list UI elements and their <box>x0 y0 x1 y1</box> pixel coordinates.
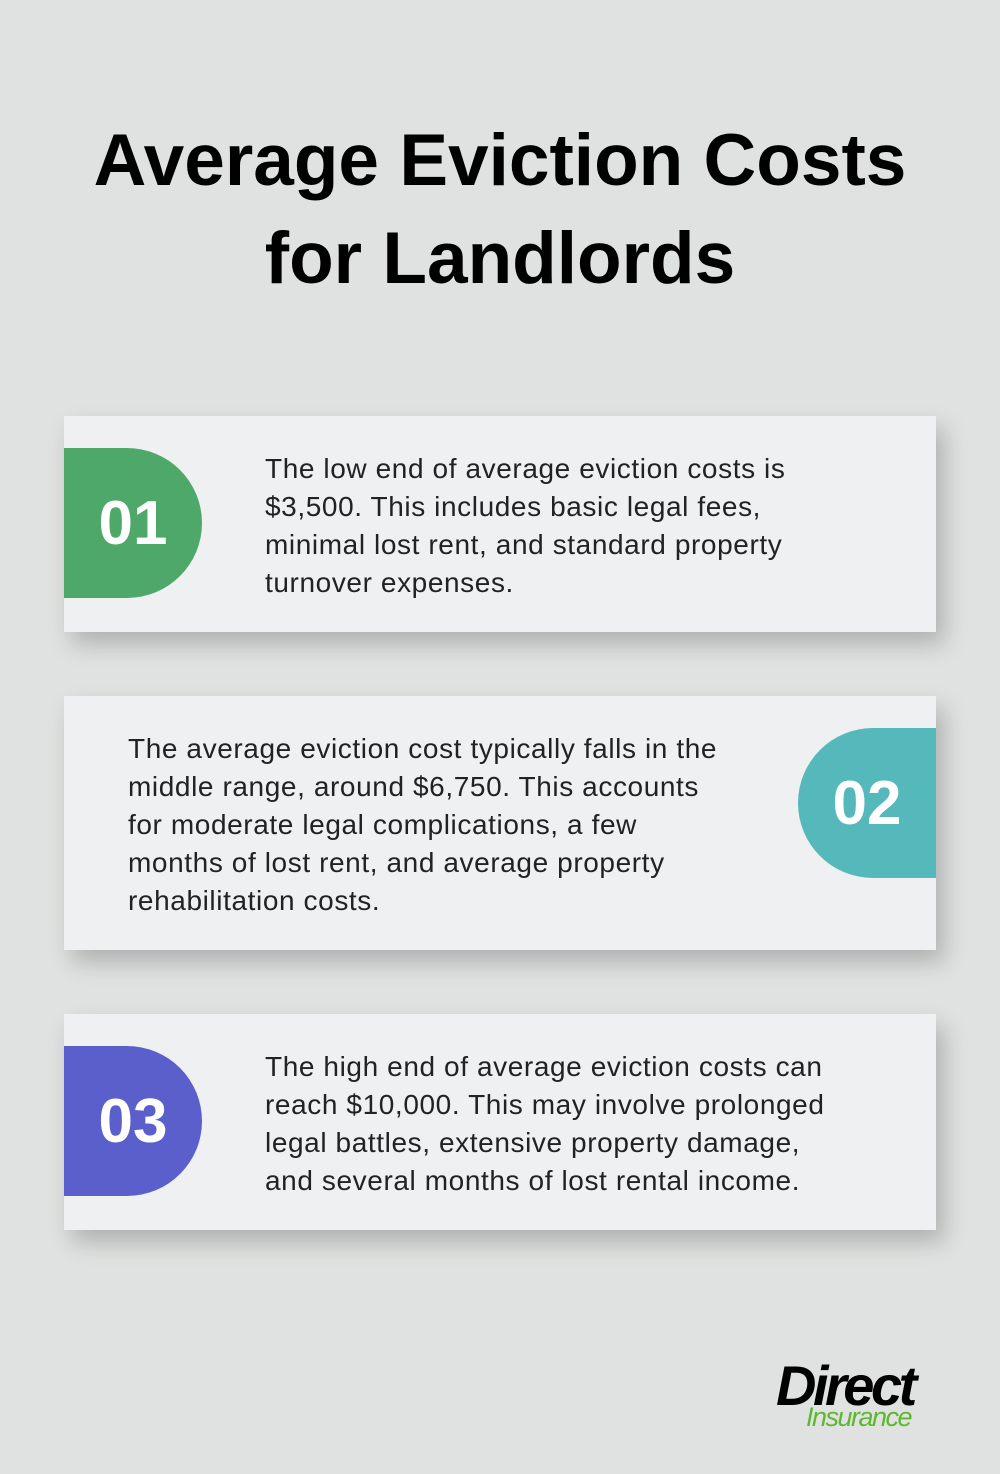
text 3: legal battles, extensive property damage, <box>265 1127 800 1158</box>
text 2 <box>128 733 717 916</box>
text 2: for moderate legal complications, a few <box>128 809 637 840</box>
text 1: $3,500. This includes basic legal fees, <box>265 491 761 522</box>
title <box>94 120 906 299</box>
text 2: The average eviction cost typically falls in the <box>128 733 717 764</box>
text 1: The low end of average eviction costs is <box>265 453 785 484</box>
badge 03: 03 <box>99 1086 167 1156</box>
badge 02: 02 <box>833 768 901 838</box>
text 3 <box>265 1051 825 1196</box>
text 3: reach $10,000. This may involve prolonged <box>265 1089 825 1120</box>
panel: card 1 <box>64 416 936 632</box>
text 3: and several months of lost rental income. <box>265 1165 800 1196</box>
text 1: turnover expenses. <box>265 567 514 598</box>
title: Average Eviction Costs <box>94 120 906 201</box>
panel: card 2 <box>64 696 936 950</box>
logo: Insurance <box>806 1402 911 1432</box>
badge 01: 01 <box>99 488 167 558</box>
text 1 <box>265 453 785 598</box>
badge 01 <box>64 448 202 598</box>
badge 03 <box>64 1046 202 1196</box>
title: for Landlords <box>265 218 735 299</box>
text 3: The high end of average eviction costs can <box>265 1051 823 1082</box>
text 2: middle range, around $6,750. This accounts <box>128 771 699 802</box>
text 2: rehabilitation costs. <box>128 885 380 916</box>
text 1: minimal lost rent, and standard property <box>265 529 782 560</box>
logo: Direct <box>776 1354 914 1417</box>
panel: card 3 <box>64 1014 936 1230</box>
badge 02 <box>798 728 936 878</box>
text 2: months of lost rent, and average property <box>128 847 665 878</box>
